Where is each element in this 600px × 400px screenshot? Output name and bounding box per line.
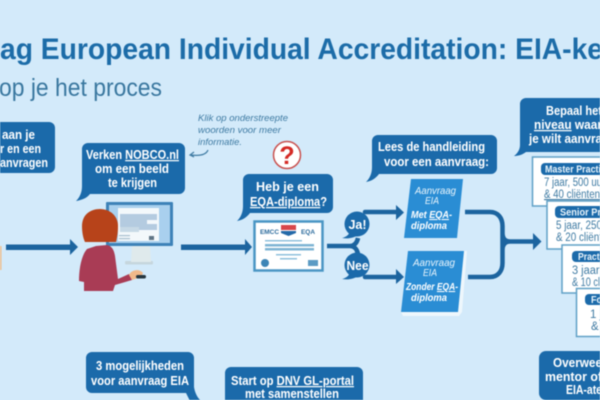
booklet: zonder EQA-diploma: Zonder EQA-	[405, 281, 458, 293]
speech bubble: ja	[342, 212, 370, 238]
left edge hand fragment	[0, 246, 2, 270]
fork connector from certificate	[327, 238, 358, 254]
icon: question mark: ?	[279, 142, 295, 170]
speech bubble: left cut-off step: r en een	[0, 142, 41, 156]
arrow: to certificate	[181, 239, 252, 255]
person at computer	[79, 202, 173, 291]
booklet: zonder EQA-diploma: EIA	[423, 267, 437, 279]
speech bubble: overweeg mentor	[539, 351, 600, 400]
hair	[82, 209, 118, 242]
booklet: met EQA-diploma: diploma	[411, 220, 447, 232]
speech bubble: start op DNV GL-portal	[225, 367, 363, 400]
icon: question mark	[274, 142, 300, 170]
booklet: zonder EQA-diploma: Aanvraag	[412, 257, 455, 269]
card: practitioner	[562, 245, 600, 293]
speech bubble: lees de handleiding	[366, 135, 497, 182]
note: klik op onderstreepte woorden	[190, 113, 288, 157]
merge connector to levels	[465, 212, 535, 277]
card: foundation	[576, 288, 600, 336]
arrow: to computer	[6, 239, 78, 255]
speech bubble: left cut-off step	[0, 122, 55, 173]
hand and mouse	[129, 270, 143, 280]
monitor	[106, 202, 173, 264]
speech bubble: nee: Nee	[346, 259, 369, 273]
speech bubble: EQA-diploma question	[237, 174, 333, 221]
arrowhead: to levels	[533, 233, 542, 250]
subtitle: op je het proces	[0, 74, 162, 102]
certificate	[254, 222, 322, 270]
speech bubble: start op DNV GL-portal: Start op DNV GL-portal	[231, 374, 354, 388]
card: senior practitioner	[547, 201, 600, 249]
speech bubble: verken NOBCO	[76, 143, 185, 201]
speech bubble: 3 mogelijkheden: voor aanvraag EIA	[91, 374, 189, 388]
speech bubble: 3 mogelijkheden	[86, 352, 201, 400]
speech bubble: left cut-off step: aan je	[2, 128, 35, 142]
speech bubble: lees de handleiding: voor een aanvraag:	[384, 155, 489, 169]
body	[79, 245, 132, 291]
card: foundation: &	[591, 321, 599, 333]
speech bubble: lees de handleiding: Lees de handleiding	[378, 140, 485, 154]
note: klik op onderstreepte woorden: Klik op onderstreepte	[198, 113, 288, 124]
arrowhead: ja	[396, 205, 404, 220]
speech bubble: 3 mogelijkheden: 3 mogelijkheden	[96, 359, 184, 373]
speech bubble: bepaal het niveau	[514, 98, 600, 156]
booklet: met EQA-diploma: Met EQA-	[411, 209, 452, 221]
speech bubble: EQA-diploma question: Heb je een	[256, 180, 319, 194]
speech bubble: verken NOBCO: te krijgen	[108, 176, 157, 190]
speech bubble: EQA-diploma question: EQA-diploma?	[250, 195, 327, 209]
booklet: met EQA-diploma: EIA	[425, 195, 439, 207]
speech bubble: verken NOBCO: Verken NOBCO.nl	[86, 148, 179, 162]
booklet: met EQA-diploma: Aanvraag	[414, 185, 456, 197]
speech bubble: left cut-off step: anvragen	[0, 156, 48, 170]
card: master practitioner	[532, 157, 600, 206]
arrowhead: nee	[396, 269, 404, 284]
booklet: zonder EQA-diploma: diploma	[411, 292, 447, 304]
booklet: met EQA-diploma	[404, 179, 463, 238]
note: klik op onderstreepte woorden: informatie.	[198, 137, 242, 148]
certificate: EMCC	[260, 229, 279, 236]
arrow: nee to booklet	[365, 275, 398, 279]
arrow: ja to booklet	[365, 210, 398, 214]
certificate: EQA	[301, 229, 315, 236]
speech bubble: ja: Ja!	[348, 218, 367, 232]
speech bubble: verken NOBCO: om een beeld	[95, 162, 169, 176]
booklet: zonder EQA-diploma	[401, 251, 467, 316]
note: klik op onderstreepte woorden: woorden voor meer	[198, 125, 282, 136]
speech bubble: nee	[342, 252, 370, 279]
